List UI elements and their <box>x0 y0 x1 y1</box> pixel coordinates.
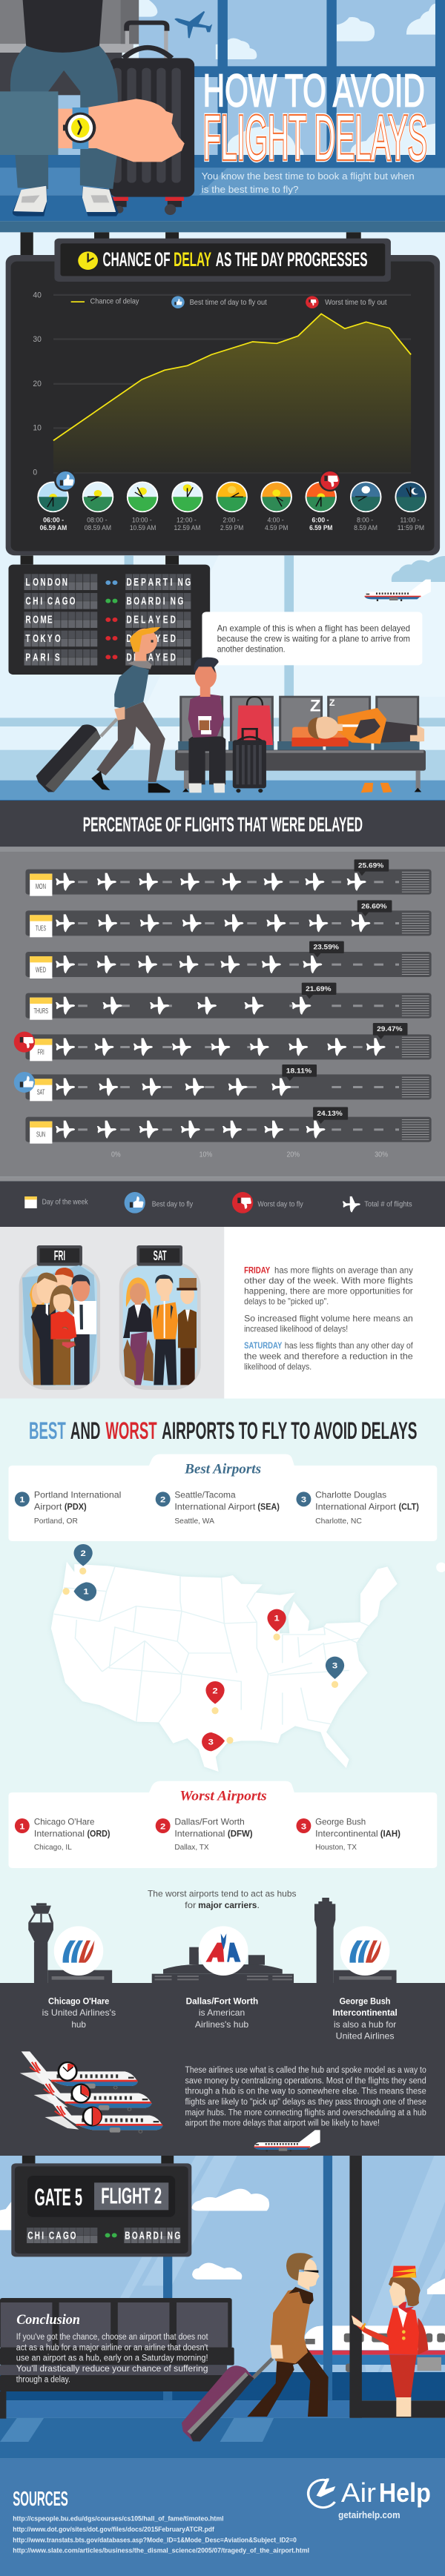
departures board <box>8 555 210 675</box>
hubs intro text <box>148 1888 297 1910</box>
best airport 1: 1 <box>19 1494 25 1504</box>
worst airport 1: (ORD) <box>87 1828 110 1838</box>
worst airports and hubs <box>0 1781 445 1987</box>
best airport 2: International Airport <box>174 1502 256 1512</box>
callout: crew example <box>202 612 422 665</box>
hubs intro text: for <box>185 1900 197 1910</box>
row: Wednesday 23.59% <box>25 941 432 979</box>
icon: map cloud <box>436 1563 445 1572</box>
row: Saturday 18.11% <box>14 1064 432 1101</box>
panel: chart frame <box>6 255 440 555</box>
time labels: 2:00 - <box>222 517 240 524</box>
runway chart background <box>0 847 445 1181</box>
board supports <box>21 232 361 257</box>
gate board: CHICAGO <box>27 2230 76 2242</box>
worst airport 1: Chicago, IL <box>34 1844 72 1852</box>
passengers: crowded Friday and sparse Saturday <box>22 1265 197 1385</box>
subtitle <box>202 171 415 196</box>
gate board: BOARDING <box>125 2230 180 2242</box>
departures board: DELAYED <box>126 632 176 644</box>
source links: http://www.transtats.bts.gov/databases.asp?Mode_ID=1&Mode_Desc=Aviation&Subject_ID2=0 <box>13 2537 297 2544</box>
US map <box>51 1562 398 1772</box>
conclusion text: through a delay. <box>16 2374 70 2384</box>
row: Monday 25.69% <box>25 859 432 896</box>
axis labels: 0% <box>111 1150 121 1159</box>
best airport 1: Portland International <box>34 1490 121 1500</box>
best airport 2: Seattle/Tacoma <box>174 1490 236 1500</box>
conclusion text: use an airport as a hub, early on a Saturday morning! <box>16 2353 208 2363</box>
panel: worst airports <box>8 1781 437 1868</box>
legend band: Total # of flights <box>364 1200 412 1208</box>
Friday sign: FRI <box>54 1248 65 1264</box>
time labels <box>40 517 424 532</box>
walking traveller <box>36 627 171 792</box>
hand <box>58 99 185 162</box>
row: Friday 29.47%: 29.47% <box>377 1026 403 1033</box>
airports heading: BEST <box>29 1417 66 1444</box>
AirHelp logo: Help <box>379 2478 431 2508</box>
gate seats <box>0 2298 234 2419</box>
heading band <box>0 801 445 847</box>
hub captions: Chicago O'Hare <box>48 1996 109 2006</box>
time labels: 8:00 - <box>357 517 373 524</box>
passenger and flight attendant <box>247 2251 428 2417</box>
panel: best airports <box>8 1454 437 1541</box>
worst airport 3: George Bush <box>315 1817 366 1827</box>
departures board: TOKYO <box>25 632 61 644</box>
source links: http://cspeople.bu.edu/dgs/courses/cs105/hall_of_fame/timoteo.html <box>13 2515 224 2523</box>
worst airport 2 <box>156 1817 253 1852</box>
Friday vs Saturday text: likelihood of delays. <box>244 1362 312 1371</box>
gate board <box>11 2156 191 2257</box>
best airport 2: Seattle, WA <box>174 1517 215 1526</box>
worst airport 3 <box>296 1817 400 1852</box>
hubs intro text: . <box>257 1900 260 1910</box>
best airport 2: 2 <box>160 1494 165 1504</box>
passenger shirt <box>23 0 103 53</box>
axis labels: 30% <box>375 1150 388 1159</box>
icon: small plane outside <box>254 2130 320 2152</box>
worst airport 2: Dallax, TX <box>174 1844 209 1852</box>
line chart: 30 <box>33 334 42 344</box>
time labels: 10:00 - <box>132 517 152 524</box>
line chart <box>33 290 411 477</box>
hub captions: is United Airlines's <box>42 2007 116 2018</box>
source links: http://www.slate.com/articles/business/the_dismal_science/2005/07/tragedy_of_the_airport.html <box>13 2547 309 2555</box>
icon: United Airlines logo <box>340 1926 389 1976</box>
floor bands <box>0 155 445 232</box>
panel backgrounds <box>0 1227 445 1399</box>
icon: worst time badge <box>319 470 341 491</box>
panel: best airports: Best Airports <box>184 1460 261 1477</box>
Friday vs Saturday text <box>244 1265 413 1371</box>
conclusion text <box>16 2311 208 2384</box>
terminal window background <box>0 555 445 801</box>
passenger legs <box>10 46 118 189</box>
source links <box>13 2515 309 2555</box>
legend band: Best day to fly <box>152 1200 194 1208</box>
best airport 3: International Airport <box>315 1502 396 1512</box>
time labels: 08:00 - <box>87 517 108 524</box>
conclusion text: act as a hub for a major airline or an airline that doesn't <box>16 2342 208 2352</box>
footer <box>0 2459 445 2576</box>
icon: American Airlines logo <box>199 1926 248 1976</box>
worst airport 1 <box>15 1817 110 1852</box>
time labels: 2.59 PM <box>220 525 243 532</box>
best airport 2 <box>156 1490 280 1526</box>
floor and window frame <box>0 2156 445 2459</box>
shopping bag and suitcase <box>233 697 273 792</box>
Friday vs Saturday text: increased likelihood of delays! <box>244 1324 348 1334</box>
Friday vs Saturday text: FRIDAY <box>244 1265 270 1275</box>
subtitle: You know the best time to book a flight but when <box>202 171 415 182</box>
time labels: 4.59 PM <box>265 525 288 532</box>
map pins <box>63 1544 344 1751</box>
best airport 3: (CLT) <box>399 1502 419 1512</box>
worst airport 1: 1 <box>19 1821 25 1831</box>
row: Friday 29.47% <box>14 1023 432 1061</box>
worst airport 2: Dallas/Fort Worth <box>174 1817 245 1827</box>
worst airport 3: Intercontinental <box>315 1828 378 1838</box>
airport window with clouds <box>139 0 445 155</box>
worst airport 2: (DFW) <box>228 1828 253 1838</box>
Saturday sign <box>136 1245 182 1266</box>
departures board: DELAYED <box>126 652 176 663</box>
row: Thursday 21.69%: THURS <box>34 1007 48 1016</box>
source links: http://www.dot.gov/sites/dot.gov/files/docs/2015FebruaryATCR.pdf <box>13 2526 215 2534</box>
line chart: 10 <box>33 423 42 432</box>
purple suitcase <box>182 2359 272 2441</box>
departures board: LONDON <box>25 576 67 588</box>
sleeping passenger <box>291 698 424 792</box>
gate board: FLIGHT 2 <box>101 2183 162 2208</box>
time labels: 8.59 AM <box>354 525 378 532</box>
gate board: GATE 5 <box>35 2185 82 2211</box>
axis labels <box>111 1150 388 1159</box>
hub captions: Dallas/Fort Worth <box>186 1996 258 2006</box>
departures board: ROME <box>25 614 53 626</box>
worst airport 1: Chicago O'Hare <box>34 1817 94 1827</box>
row: Sunday 24.13% <box>25 1107 432 1144</box>
time labels: 08.59 AM <box>85 525 111 532</box>
AirHelp logo: Air <box>341 2478 376 2508</box>
Friday sign <box>37 1245 82 1266</box>
time labels: 12:00 - <box>177 517 197 524</box>
row: Tuesday 26.60% <box>25 900 432 937</box>
hub captions <box>42 1996 398 2041</box>
skyline <box>0 1898 445 1987</box>
hub captions: Airlines's hub <box>195 2019 248 2030</box>
Saturday passengers <box>123 1274 197 1385</box>
departures board: BOARDING <box>126 595 183 607</box>
time labels: 6.59 PM <box>309 525 332 532</box>
time labels: 11:59 PM <box>398 525 424 532</box>
worst airport 3: 3 <box>301 1821 306 1831</box>
line chart: 40 <box>33 290 42 299</box>
conclusion text: You'll drastically reduce your chance of suffering <box>16 2364 208 2374</box>
best airport 1: Airport <box>34 1502 62 1512</box>
terminal scene <box>0 555 445 801</box>
chart legend: Best time of day to fly out <box>190 299 267 307</box>
best airport 3 <box>296 1490 419 1526</box>
row: Thursday 21.69%: 21.69% <box>306 986 332 993</box>
time labels: 4:00 - <box>267 517 284 524</box>
chart legend: Worst time to fly out <box>325 299 387 307</box>
sleeping passenger: Z <box>329 698 335 708</box>
row: Monday 25.69%: 25.69% <box>358 862 384 870</box>
airports background <box>0 1399 445 1988</box>
sky window <box>0 2156 445 2373</box>
Friday vs Saturday text: has more flights on average than any <box>274 1265 413 1275</box>
departures board: PARIS <box>25 652 60 663</box>
chart legend <box>71 296 387 308</box>
map pins: 2 <box>81 1549 86 1558</box>
icon: Saturday window frame <box>119 1262 201 1390</box>
row: Friday 29.47%: FRI <box>38 1048 44 1056</box>
passenger shoes <box>13 185 119 216</box>
hero section <box>0 0 445 232</box>
sleeping passenger: Z <box>310 698 320 715</box>
hub captions: is also a hub for <box>334 2019 397 2030</box>
row: Tuesday 26.60%: 26.60% <box>361 903 387 910</box>
chart section <box>6 232 440 555</box>
Friday vs Saturday text: the week and therefore a reduction in the <box>244 1351 413 1361</box>
hub and spoke explanation: airport the more delays that airport will be likely to have! <box>185 2118 380 2128</box>
flight attendant <box>352 2266 428 2417</box>
chart title: DELAY <box>174 249 211 271</box>
time labels: 6:00 - <box>312 517 329 524</box>
legend band: Day of the week <box>42 1198 88 1206</box>
hub captions: Intercontinental <box>332 2007 398 2018</box>
panel: worst airports: Worst Airports <box>179 1787 267 1804</box>
time labels: 06.59 AM <box>40 525 67 532</box>
AirHelp logo <box>309 2478 431 2520</box>
axis labels: 10% <box>200 1150 213 1159</box>
walking passenger <box>247 2251 329 2417</box>
airports section <box>0 1399 445 1988</box>
chart title: CHANCE OF <box>103 249 171 271</box>
footer: SOURCES <box>13 2488 68 2510</box>
AirHelp logo: getairhelp.com <box>338 2510 400 2520</box>
line chart: 0 <box>33 467 37 477</box>
icon: best time badge <box>54 470 77 491</box>
map pins: 3 <box>332 1661 337 1670</box>
suitcase <box>109 23 194 215</box>
best airport 1 <box>15 1490 121 1526</box>
row: Saturday 18.11%: SAT <box>37 1088 45 1096</box>
Friday vs Saturday text: SATURDAY <box>244 1340 282 1351</box>
time labels: 06:00 - <box>43 517 64 524</box>
Friday vs Saturday text: delays to be "picked up". <box>244 1297 329 1306</box>
icon: Friday window frame <box>19 1262 100 1390</box>
hub and spoke explanation <box>185 2065 426 2128</box>
chart title <box>103 249 368 271</box>
best airport 1: (PDX) <box>65 1502 87 1512</box>
callout: crew example: another destination. <box>217 644 286 654</box>
bench with seats <box>175 697 426 792</box>
icon: distant plane <box>365 580 431 601</box>
map pins: 1 <box>274 1613 280 1623</box>
row: Thursday 21.69% <box>25 983 432 1020</box>
hubs intro text: major carriers <box>198 1900 257 1910</box>
cloud <box>392 556 445 582</box>
row: Wednesday 23.59%: 23.59% <box>313 944 339 951</box>
hub dark background <box>0 1983 445 2156</box>
line chart: 20 <box>33 379 42 388</box>
gate scene <box>0 2130 445 2459</box>
row: Wednesday 23.59%: WED <box>36 966 46 974</box>
departures board: DEPARTING <box>126 576 191 588</box>
axis labels: 20% <box>286 1150 300 1159</box>
delays by day section <box>0 801 445 1227</box>
Friday passengers <box>22 1265 96 1385</box>
Friday vs Saturday text: happening, there are more opportunities for <box>244 1286 413 1296</box>
Saturday sign: SAT <box>154 1248 167 1264</box>
departures board: DELAYED <box>126 614 176 626</box>
icon: delayed planes <box>20 2051 162 2133</box>
time labels: 12.59 AM <box>174 525 201 532</box>
best airport 3: Charlotte Douglas <box>315 1490 386 1500</box>
map pins: 1 <box>83 1586 89 1596</box>
icon: United Airlines logo <box>54 1926 103 1976</box>
row: Sunday 24.13%: 24.13% <box>317 1110 343 1118</box>
hub captions: George Bush <box>340 1996 391 2006</box>
airports heading: AND <box>70 1417 100 1444</box>
row: Monday 25.69%: MON <box>36 883 46 891</box>
title <box>203 66 427 173</box>
hubs intro text: The worst airports tend to act as hubs <box>148 1888 297 1898</box>
best airport 3: 3 <box>301 1494 306 1504</box>
chart legend: Chance of delay <box>90 297 139 305</box>
row: Sunday 24.13%: SUN <box>36 1130 45 1139</box>
sleeve and cuff <box>0 91 80 155</box>
seat behind passenger <box>0 0 139 155</box>
hub captions: hub <box>71 2019 86 2030</box>
row: Saturday 18.11%: 18.11% <box>286 1067 312 1075</box>
chart heading board <box>54 239 391 282</box>
map pins: 2 <box>212 1686 218 1695</box>
Friday vs Saturday text: So increased flight volume here means an <box>244 1313 413 1323</box>
icon: plane in sky <box>174 11 212 39</box>
best airport 3: Charlotte, NC <box>315 1517 362 1526</box>
conclusion text: Conclusion <box>16 2311 80 2328</box>
hub captions: is American <box>199 2007 245 2018</box>
hub captions: United Airlines <box>336 2031 395 2041</box>
legend band: Worst day to fly <box>257 1200 303 1208</box>
best airport 1: Portland, OR <box>34 1517 78 1526</box>
subtitle: is the best time to fly? <box>202 185 299 196</box>
legend band <box>0 1181 445 1227</box>
seated passenger <box>188 658 225 792</box>
icon: clock <box>78 251 98 270</box>
worst airport 2: International <box>174 1828 225 1838</box>
time labels: 11:00 - <box>400 517 420 524</box>
hub section <box>0 1983 445 2156</box>
worst airport 3: Houston, TX <box>315 1844 357 1852</box>
best airport 2: (SEA) <box>257 1502 280 1512</box>
icon: wrist watch <box>63 107 96 149</box>
row: Tuesday 26.60%: TUES <box>36 924 46 933</box>
large plane outside <box>303 2325 445 2372</box>
time of day clocks <box>38 482 426 511</box>
friday and saturday section <box>0 1227 445 1399</box>
time labels: 10.59 AM <box>130 525 156 532</box>
airports heading: WORST <box>105 1417 157 1444</box>
airports heading <box>29 1417 417 1444</box>
departures board: CHICAGO <box>25 595 76 607</box>
map pins: 3 <box>208 1737 214 1746</box>
worst airport 3: (IAH) <box>380 1828 400 1838</box>
Friday vs Saturday text: other day of the week. With more flights <box>244 1275 413 1285</box>
conclusion text: If you've got the chance, choose an airport that does not <box>16 2332 208 2342</box>
worst airport 1: International <box>34 1828 85 1838</box>
worst airport 2: 2 <box>160 1821 165 1831</box>
footer background <box>0 2459 445 2576</box>
